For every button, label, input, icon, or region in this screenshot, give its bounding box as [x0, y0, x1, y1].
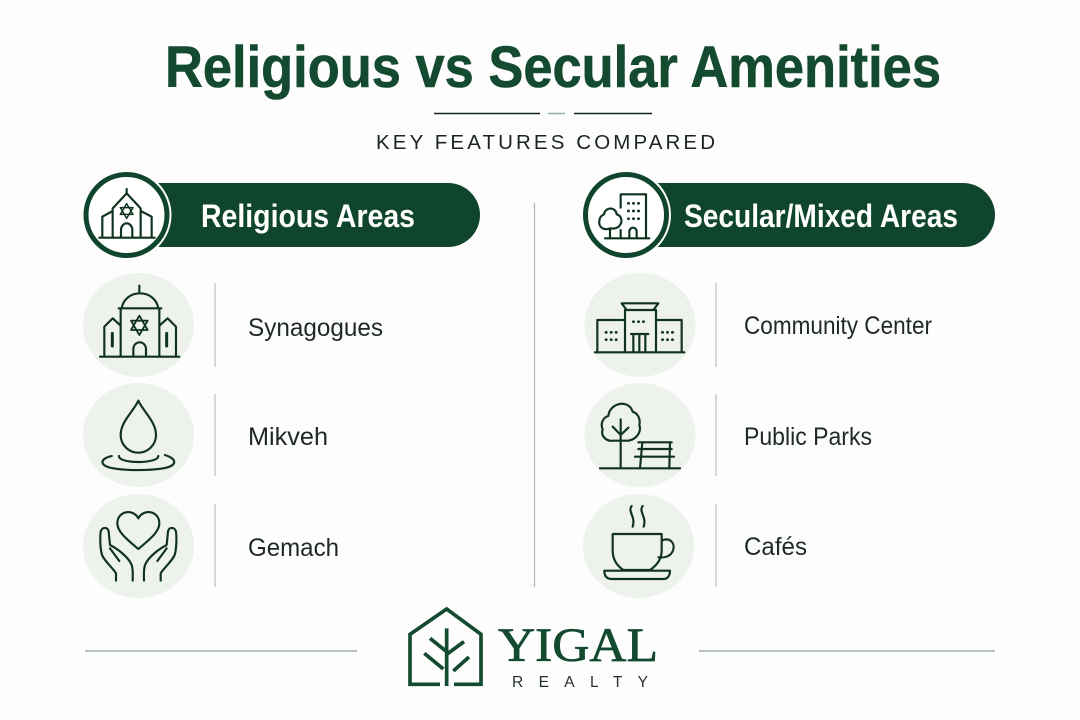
icon: water drop — [83, 383, 194, 487]
row divider — [214, 504, 216, 587]
row: gemach — [83, 494, 339, 598]
icon: tree and bench — [584, 383, 696, 487]
row divider — [214, 394, 216, 476]
icon: synagogue — [83, 273, 194, 377]
logo wordmark: YIGAL — [498, 619, 658, 672]
label: Cafés — [744, 533, 807, 561]
row divider — [715, 283, 717, 367]
label: Public Parks — [744, 423, 872, 451]
row divider — [214, 283, 216, 367]
icon: house with tree — [410, 609, 481, 686]
icon: coffee cup — [583, 494, 694, 598]
row: cafes — [583, 494, 807, 598]
row: public parks — [584, 383, 872, 487]
title: Religious vs Secular Amenities — [165, 35, 941, 100]
panel: secular/mixed areas — [581, 170, 995, 598]
footer rule left — [85, 650, 357, 652]
logo: yigal realty — [410, 609, 658, 691]
heading banner: religious areas — [82, 170, 480, 260]
footer rule right — [699, 650, 995, 652]
icon: hands and heart — [83, 494, 194, 598]
label: Synagogues — [248, 314, 383, 342]
row: synagogues — [83, 273, 383, 377]
heading banner: religious areas: Religious Areas — [201, 198, 415, 234]
center divider — [534, 203, 536, 587]
label: Gemach — [248, 534, 339, 562]
logo tagline: REALTY — [512, 674, 648, 691]
label: Mikveh — [248, 423, 328, 451]
row: community center — [584, 273, 932, 377]
title rule — [434, 112, 652, 114]
subtitle: KEY FEATURES COMPARED — [376, 131, 715, 154]
icon: header building and tree — [599, 194, 649, 238]
label: Community Center — [744, 312, 932, 340]
row divider — [715, 504, 717, 587]
row: mikveh — [83, 383, 328, 487]
icon: community center — [584, 273, 696, 377]
heading banner: secular/mixed areas — [581, 170, 995, 260]
panel: religious areas — [82, 170, 480, 598]
heading banner: secular/mixed areas: Secular/Mixed Areas — [684, 198, 958, 234]
row divider — [715, 394, 717, 476]
icon: header synagogue — [99, 189, 155, 238]
